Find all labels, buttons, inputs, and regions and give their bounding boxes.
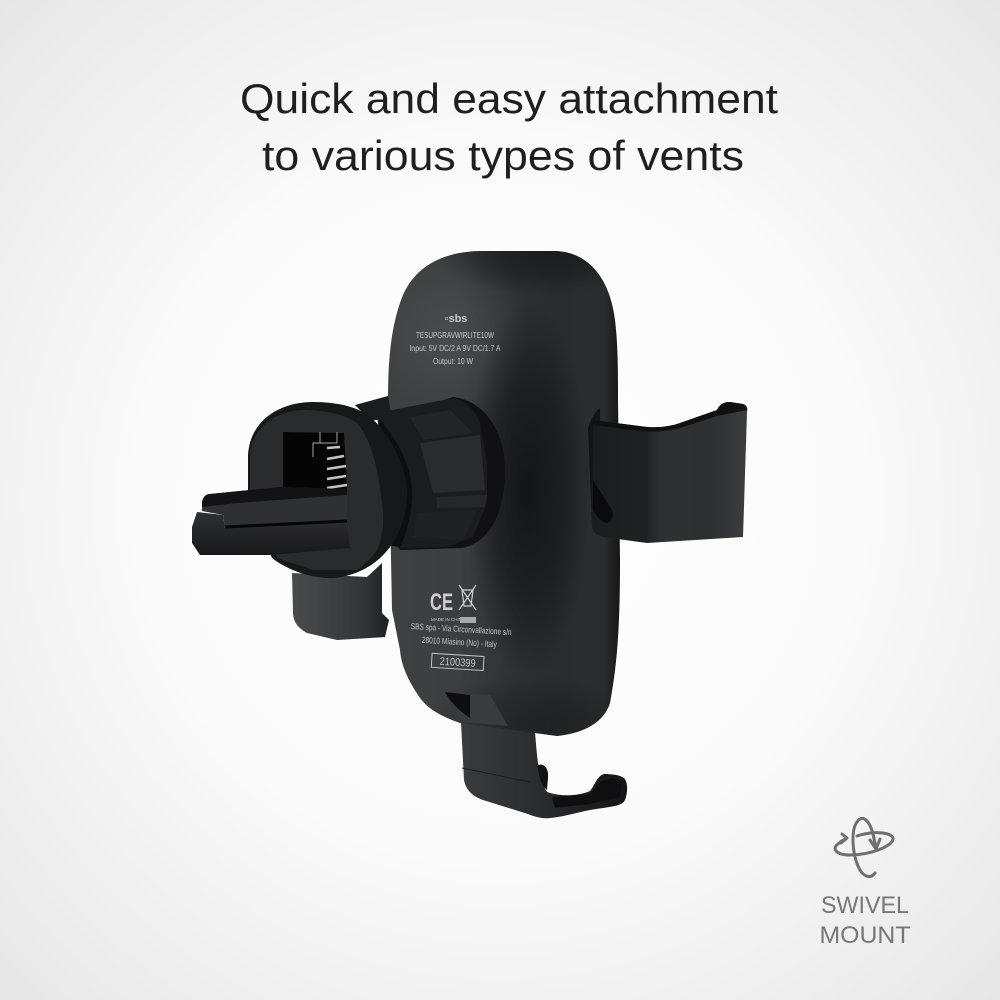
right side clamp arm <box>588 402 747 543</box>
label: brand and specs: TESUPGRAVWIRLITE10W <box>416 330 495 340</box>
round vent plate <box>192 402 407 578</box>
swivel collar <box>355 396 505 550</box>
label: address and batch number: 28010 Miasino (No) - Italy <box>422 635 498 649</box>
spring <box>327 447 347 488</box>
label: CE and recycling marks <box>430 585 476 623</box>
title <box>240 75 778 179</box>
label: brand and specs <box>410 313 501 366</box>
body shading <box>418 251 606 736</box>
main charger body <box>388 251 620 736</box>
label: CE and recycling marks: MADE IN CHINA <box>431 617 465 622</box>
icon: swivel rotation axes <box>835 818 893 877</box>
title: Quick and easy attachment <box>240 75 778 122</box>
badge text: SWIVEL <box>821 892 909 919</box>
upper arm <box>202 487 347 528</box>
lower arm <box>192 512 350 555</box>
title: to various types of vents <box>262 132 744 179</box>
label: brand and specs: Input: 5V DC/2 A 9V DC/1.7 A <box>410 343 501 353</box>
label: brand and specs: ▫sbs <box>445 313 467 325</box>
bottom hook <box>461 722 627 818</box>
clamp slot <box>593 480 613 523</box>
label: address and batch number: 2100399 <box>439 656 476 670</box>
badge text: MOUNT <box>820 922 911 949</box>
label: brand and specs: Output: 10 W <box>433 356 474 366</box>
label: CE and recycling marks: CE <box>430 589 453 616</box>
bottom cut-out <box>445 692 508 726</box>
swivel mount badge <box>820 818 911 949</box>
spring window <box>283 432 347 492</box>
product: car vent phone holder <box>192 205 747 818</box>
label: address and batch number: SBS spa - Via Circonvallazione s/n <box>410 621 512 637</box>
label: address and batch number <box>408 621 512 672</box>
badge text <box>820 892 911 949</box>
lower vent blade <box>292 563 389 640</box>
